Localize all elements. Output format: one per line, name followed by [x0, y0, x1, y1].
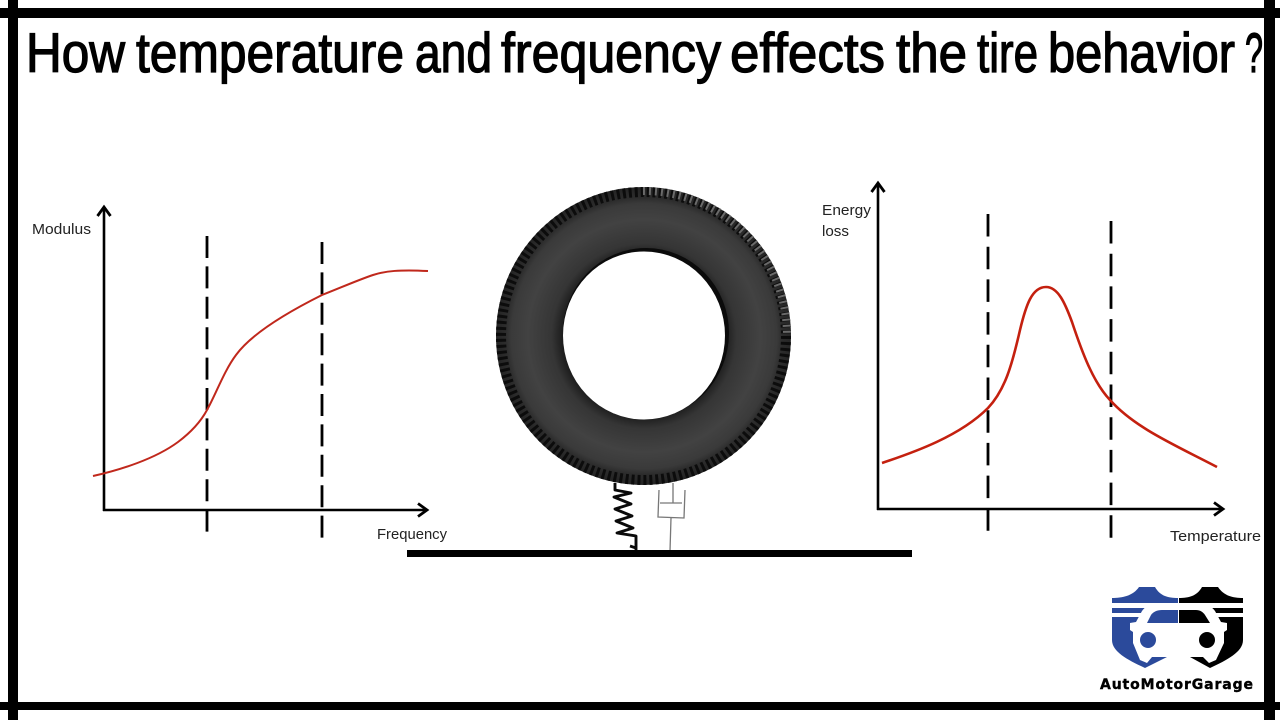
title: the [896, 21, 967, 84]
label: modulus: Modulus [32, 222, 91, 238]
tire hole [563, 252, 725, 420]
title: temperature [136, 21, 404, 84]
chart: energy loss vs temperature [822, 183, 1261, 545]
modulus curve [93, 270, 428, 476]
title: and [415, 21, 492, 84]
title: effects [730, 21, 885, 84]
title: How [26, 21, 125, 84]
dashed marker left [987, 214, 989, 533]
windshield left [1147, 610, 1178, 623]
temperature x axis [877, 508, 1223, 510]
dashed marker left [206, 236, 208, 532]
modulus y axis [103, 207, 105, 511]
dashed marker right [1110, 221, 1112, 540]
damper [658, 483, 685, 551]
ground line [407, 550, 912, 557]
shield right half [1179, 587, 1243, 668]
spring [614, 483, 636, 551]
shield stripes [1111, 603, 1244, 617]
label: temperature: Temperature [1170, 529, 1261, 545]
energy loss y axis [877, 183, 879, 510]
tire on spring and damper [496, 187, 791, 551]
wheel left [1140, 632, 1156, 648]
chart: modulus vs frequency [32, 207, 448, 543]
frequency x axis [103, 509, 427, 511]
wheel right [1199, 632, 1215, 648]
title: behavior [1048, 21, 1235, 84]
title: ? [1245, 21, 1263, 84]
shield left half [1112, 587, 1178, 668]
tire tread highlight [640, 191, 787, 336]
tire body [496, 187, 791, 485]
energy loss curve [882, 287, 1217, 467]
windshield right [1179, 610, 1210, 623]
logo wordmark: AutoMotorGarage [1100, 677, 1253, 693]
label: energy loss: loss [822, 224, 849, 240]
dashed marker right [321, 242, 323, 538]
title: tire [977, 21, 1038, 84]
tire tread [501, 192, 786, 480]
car body [1130, 604, 1227, 663]
label: energy loss: Energy [822, 203, 872, 219]
title: frequency [501, 21, 721, 84]
logo: AutoMotorGarage [1100, 587, 1253, 693]
inner rim shadow [563, 248, 729, 418]
tire [496, 187, 791, 485]
label: frequency: Frequency [377, 527, 448, 543]
